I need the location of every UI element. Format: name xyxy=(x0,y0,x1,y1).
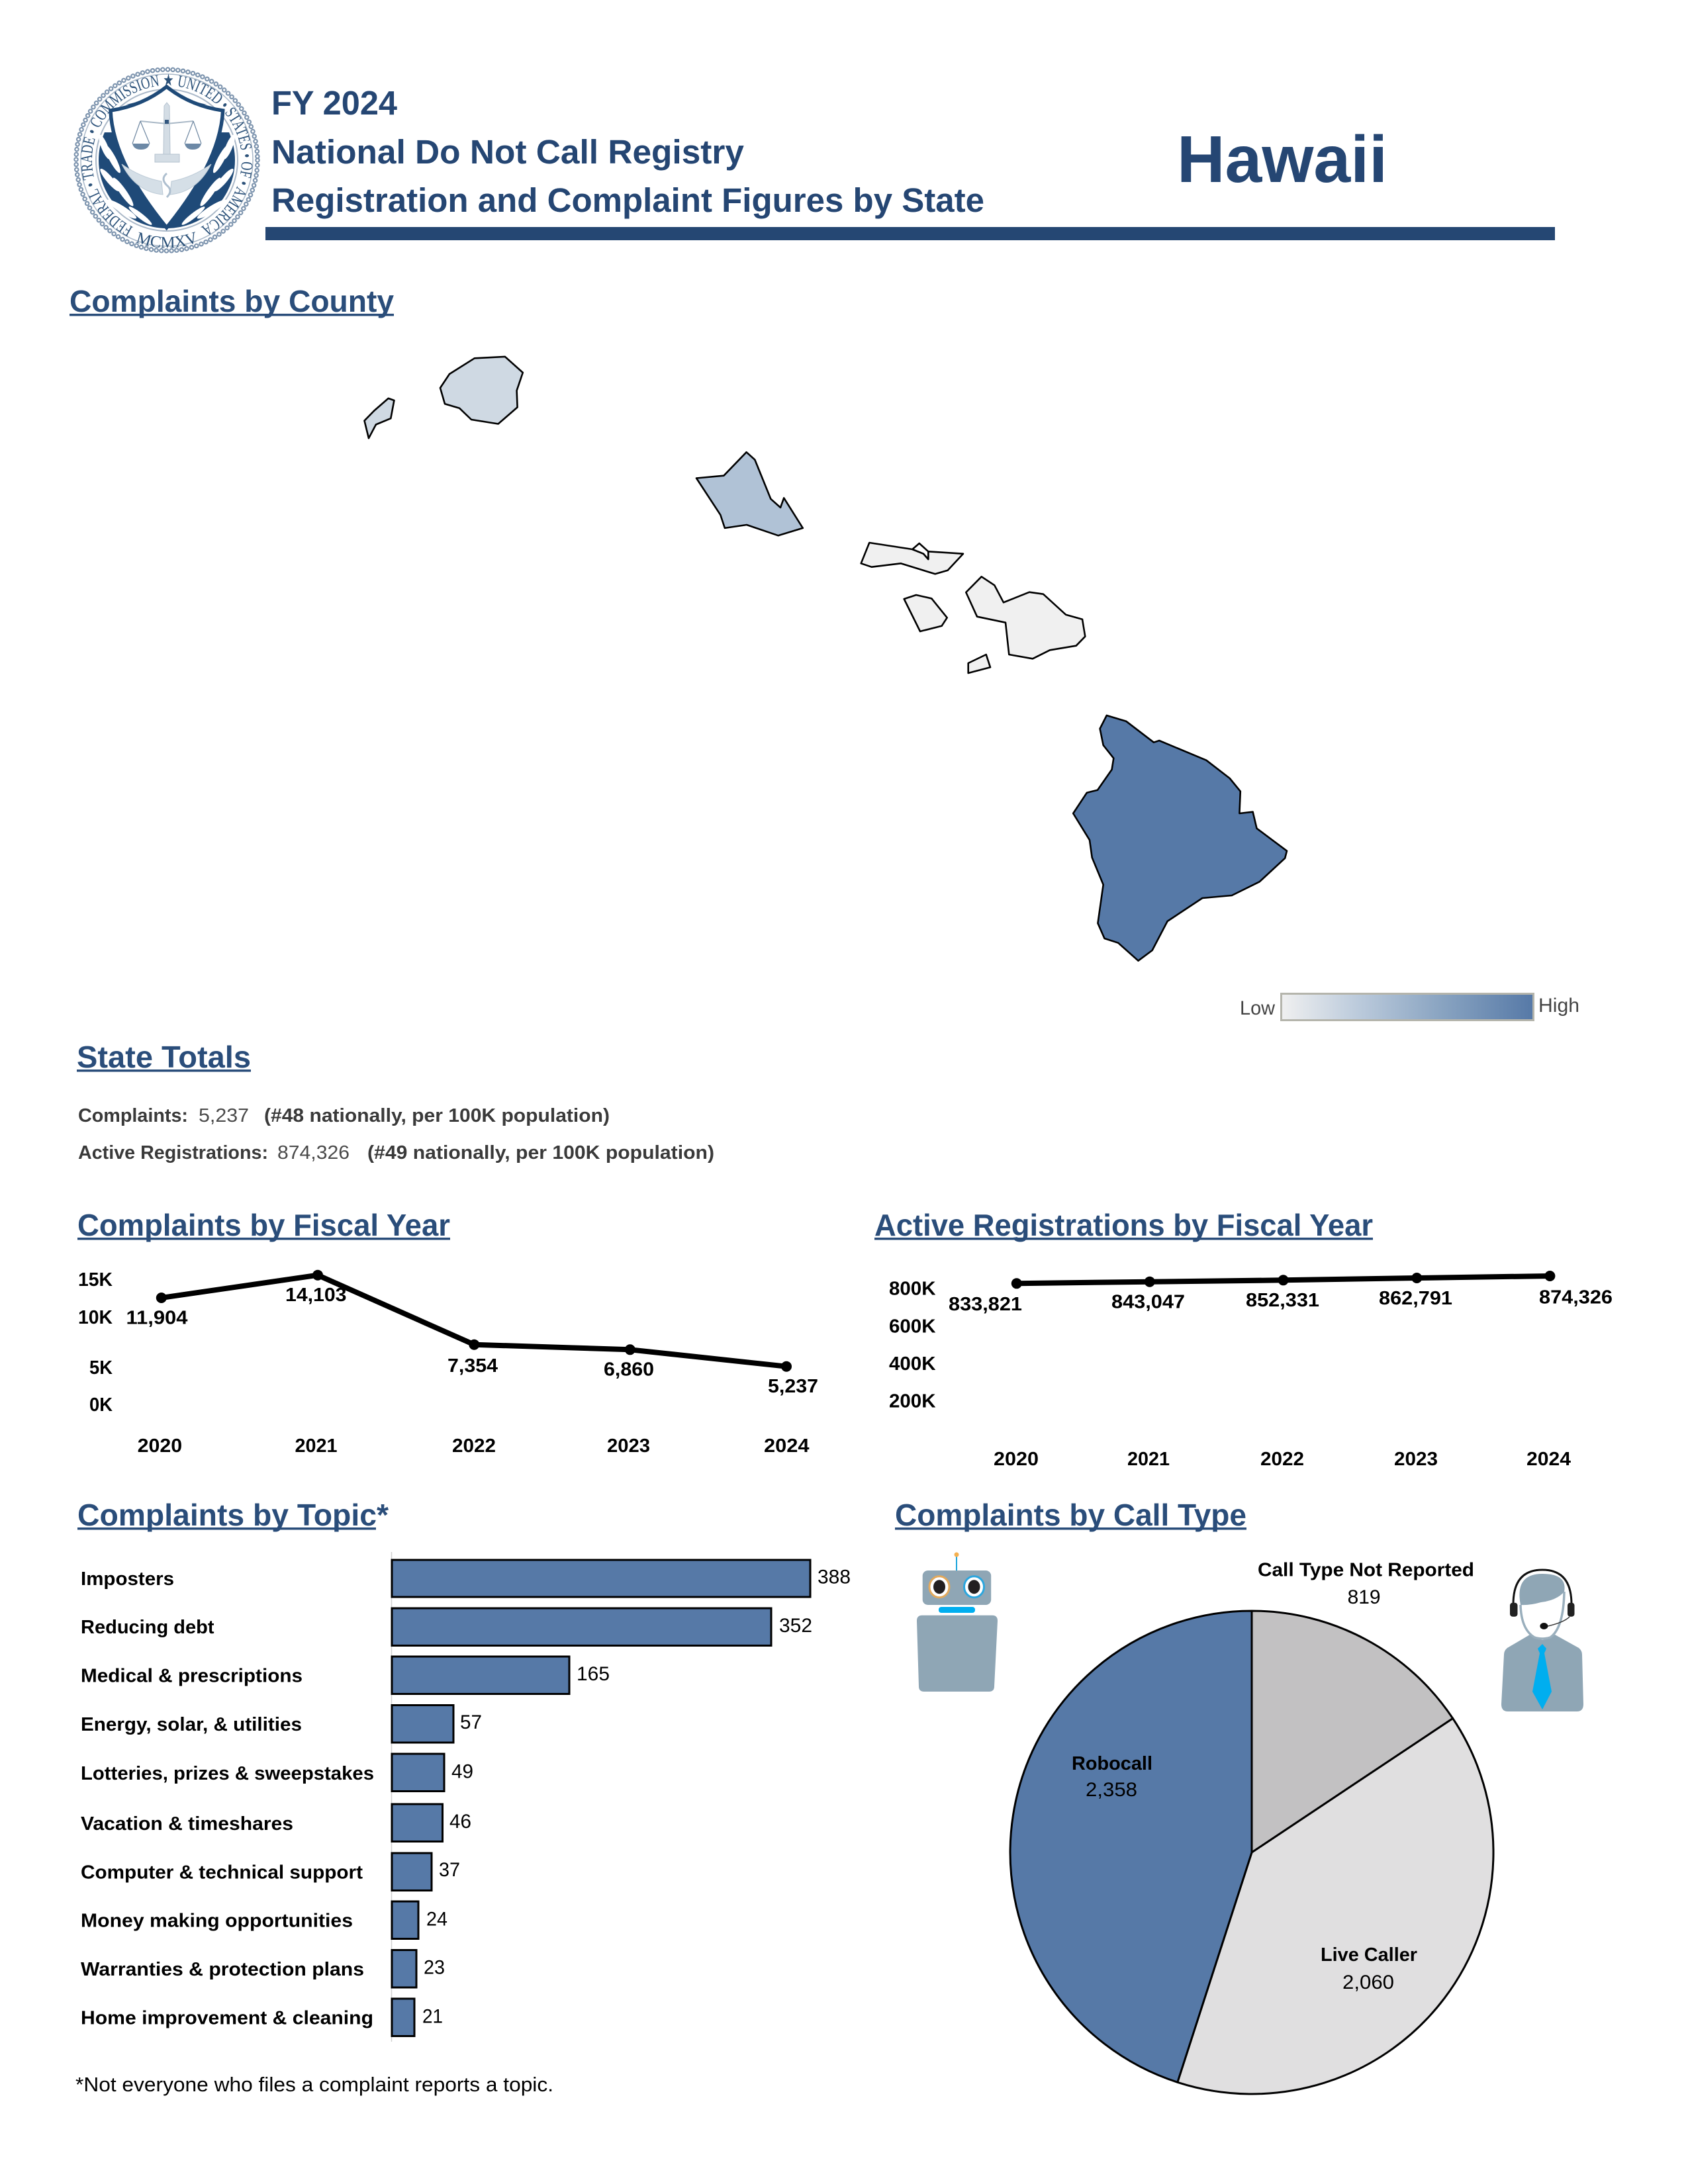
legend: low to high: High xyxy=(1538,995,1579,1017)
title: National Do Not Call Registry: National Do Not Call Registry xyxy=(271,133,745,171)
bar: Computer & technical support xyxy=(81,1853,460,1890)
county: Maui (Lanai) xyxy=(904,595,947,631)
text: active registrations total: (#49 nationally, per 100K population) xyxy=(367,1142,714,1163)
county: Kauai xyxy=(440,357,523,424)
bar: Imposters: 388 xyxy=(818,1567,851,1588)
footnote: *Not everyone who files a complaint reports a topic. xyxy=(75,2073,553,2096)
line chart: complaints: 6,860 xyxy=(604,1359,654,1381)
line chart: registrations: 800K xyxy=(889,1279,936,1300)
slice: call type not reported xyxy=(1252,1611,1453,1852)
bar: Warranties & protection plans xyxy=(81,1950,445,1987)
line chart: registrations: 2022 xyxy=(1260,1449,1304,1470)
heading: complaints by fiscal year: Complaints by Fiscal Year xyxy=(77,1208,450,1242)
line chart: registrations: 2024 xyxy=(1526,1449,1571,1470)
panel: complaints by county xyxy=(70,284,1579,1021)
line chart: registrations: 874,326 xyxy=(1539,1287,1613,1308)
bar chart: topics xyxy=(81,1552,851,2042)
title: Registration and Complaint Figures by State: Registration and Complaint Figures by State xyxy=(271,181,984,219)
line chart: registrations xyxy=(889,1271,1613,1470)
line chart: complaints: 2024 xyxy=(764,1435,809,1457)
line chart: complaints: 2020 xyxy=(138,1435,182,1457)
line chart: complaints xyxy=(78,1269,818,1457)
slice: robocall xyxy=(1010,1611,1252,2082)
bar: Vacation & timeshares: 46 xyxy=(449,1811,471,1833)
bar: Reducing debt: 352 xyxy=(779,1615,812,1637)
line chart: complaints: 15K xyxy=(78,1269,113,1291)
label: call type not reported xyxy=(1258,1560,1474,1608)
heading: state totals: State Totals xyxy=(77,1040,251,1074)
line chart: registrations: 2021 xyxy=(1127,1449,1170,1470)
bar: Reducing debt xyxy=(81,1608,812,1645)
icon: FTC seal: FEDERAL • TRADE • COMMISSION ★ UNITED • STATES • OF • AMERICA xyxy=(81,74,253,237)
line chart: complaints: 2023 xyxy=(607,1435,650,1457)
bar: Lotteries, prizes & sweepstakes xyxy=(81,1754,473,1791)
heading: complaints by call type: Complaints by Call Type xyxy=(895,1498,1246,1532)
text: active registrations total: Active Registrations: xyxy=(78,1142,268,1163)
slice: live caller xyxy=(1178,1718,1493,2094)
text: complaints total xyxy=(78,1105,610,1126)
bar: Medical & prescriptions: Medical & prescriptions xyxy=(81,1666,303,1687)
bar: Energy, solar, & utilities: 57 xyxy=(460,1711,482,1733)
county: Kalawao xyxy=(912,543,928,559)
county: Hawaii xyxy=(1073,715,1287,961)
icon: live agent with headset xyxy=(1501,1570,1583,1711)
bar: Home improvement & cleaning: Home improvement & cleaning xyxy=(81,2007,373,2028)
line chart: complaints: 11,904 xyxy=(126,1308,188,1329)
label: call type not reported: Call Type Not Reported xyxy=(1258,1560,1474,1581)
panel: complaints by call type xyxy=(895,1498,1583,2094)
line chart: registrations: 200K xyxy=(889,1391,936,1412)
bar: Warranties & protection plans: Warranties & protection plans xyxy=(81,1959,364,1980)
bar: Medical & prescriptions xyxy=(81,1657,610,1694)
bar: Reducing debt: Reducing debt xyxy=(81,1617,214,1638)
county: Maui (Molokai) xyxy=(861,543,963,574)
line chart: complaints: 5K xyxy=(89,1357,113,1379)
line chart: registrations: 2020 xyxy=(994,1449,1039,1470)
line chart: complaints: 2022 xyxy=(452,1435,496,1457)
line chart: complaints: 5,237 xyxy=(768,1376,818,1397)
map: Hawaii counties xyxy=(364,357,1287,961)
line chart: complaints: 0K xyxy=(89,1394,113,1416)
panel: state totals xyxy=(77,1040,714,1163)
label: live caller: Live Caller xyxy=(1321,1944,1417,1966)
bar: Money making opportunities: 24 xyxy=(426,1908,447,1930)
icon: robot xyxy=(917,1553,998,1692)
bar: Imposters: Imposters xyxy=(81,1569,174,1590)
bar: Computer & technical support: 37 xyxy=(439,1859,460,1881)
line chart: registrations: 843,047 xyxy=(1111,1292,1185,1313)
heading: complaints by county: Complaints by County xyxy=(70,284,394,318)
label: robocall: 2,358 xyxy=(1086,1779,1137,1801)
label: live caller xyxy=(1321,1944,1417,1993)
bar: Money making opportunities xyxy=(81,1901,447,1939)
title: FY 2024: FY 2024 xyxy=(271,84,398,122)
line chart: complaints: 10K xyxy=(78,1307,113,1328)
text: complaints total: Complaints: xyxy=(78,1105,188,1126)
panel: active registrations by fiscal year xyxy=(874,1208,1613,1470)
bar: Computer & technical support: Computer & technical support xyxy=(81,1862,363,1883)
pie chart: call types xyxy=(1010,1611,1493,2094)
bar: Lotteries, prizes & sweepstakes: Lotteries, prizes & sweepstakes xyxy=(81,1763,374,1784)
text: active registrations total xyxy=(78,1142,714,1163)
label: live caller: 2,060 xyxy=(1342,1972,1394,1993)
bar: Money making opportunities: Money making opportunities xyxy=(81,1911,353,1932)
bar: Imposters xyxy=(81,1560,851,1597)
county: Honolulu xyxy=(696,452,803,535)
label: robocall xyxy=(1072,1753,1152,1801)
line chart: complaints: 7,354 xyxy=(447,1355,498,1377)
bar: Home improvement & cleaning: 21 xyxy=(422,2006,443,2028)
line chart: registrations: 833,821 xyxy=(949,1294,1022,1315)
header xyxy=(73,67,1555,253)
bar: Energy, solar, & utilities: Energy, solar, & utilities xyxy=(81,1714,302,1735)
panel: complaints by fiscal year xyxy=(77,1208,818,1457)
heading: active registrations by fiscal year: Active Registrations by Fiscal Year xyxy=(874,1208,1373,1242)
bar: Vacation & timeshares: Vacation & timeshares xyxy=(81,1813,293,1835)
county: Maui (Kahoolawe) xyxy=(968,655,990,673)
bar: Vacation & timeshares xyxy=(81,1804,471,1841)
text: complaints total: (#48 nationally, per 100K population) xyxy=(264,1105,610,1126)
line chart: complaints: 14,103 xyxy=(285,1285,347,1306)
text: active registrations total: 874,326 xyxy=(277,1142,350,1163)
line chart: registrations: 400K xyxy=(889,1353,936,1375)
county: Kauai (Niihau) xyxy=(364,398,394,438)
label: robocall: Robocall xyxy=(1072,1753,1152,1774)
legend: low to high: Low xyxy=(1240,997,1275,1019)
legend: low to high xyxy=(1240,994,1579,1021)
county: Maui xyxy=(966,576,1085,659)
line chart: complaints: 2021 xyxy=(295,1435,338,1457)
label: call type not reported: 819 xyxy=(1348,1586,1381,1608)
title: state name: Hawaii xyxy=(1177,122,1387,197)
line chart: registrations: 2023 xyxy=(1394,1449,1438,1470)
heading: complaints by topic: Complaints by Topic* xyxy=(77,1498,389,1532)
line chart: registrations: 600K xyxy=(889,1316,936,1337)
bar: Medical & prescriptions: 165 xyxy=(577,1663,610,1685)
bar: Home improvement & cleaning xyxy=(81,1999,443,2036)
line chart: registrations: 862,791 xyxy=(1379,1288,1452,1309)
panel: complaints by topic xyxy=(75,1498,851,2096)
bar: Lotteries, prizes & sweepstakes: 49 xyxy=(451,1761,473,1783)
bar: Warranties & protection plans: 23 xyxy=(424,1957,445,1979)
line chart: registrations: 852,331 xyxy=(1246,1290,1319,1311)
header rule xyxy=(265,227,1555,240)
text: complaints total: 5,237 xyxy=(199,1105,249,1126)
bar: Energy, solar, & utilities xyxy=(81,1705,482,1743)
